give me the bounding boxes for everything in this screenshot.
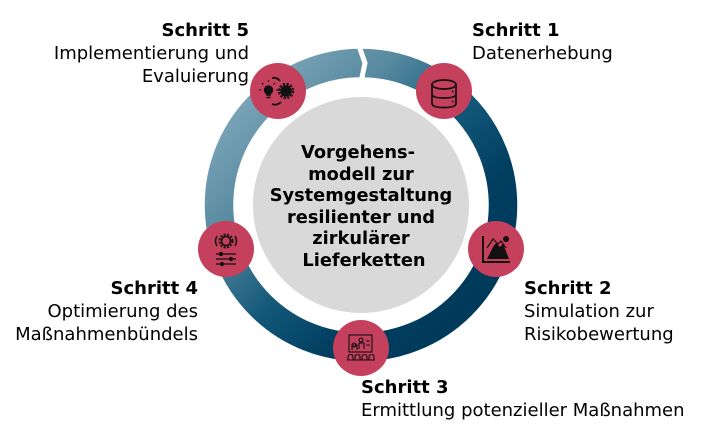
label: step 3: Schritt 3 — [361, 377, 448, 398]
center circle — [253, 97, 469, 313]
label: step 4: Optimierung des — [47, 301, 198, 322]
center title: Systemgestaltung — [270, 185, 452, 206]
label: step 5: Evaluierung — [142, 66, 249, 87]
icon: risk chart — [483, 236, 510, 262]
label: step 1 — [472, 20, 613, 64]
label: step 2: Simulation zur — [524, 301, 654, 322]
center title: Vorgehens- — [301, 142, 415, 163]
label: step 2: Schritt 2 — [524, 278, 612, 299]
step 2 node — [468, 221, 524, 277]
center title: modell zur — [308, 164, 414, 184]
label: step 4: Maßnahmenbündels — [15, 324, 198, 345]
label: step 3 — [361, 377, 685, 421]
center title: zirkulärer — [312, 228, 410, 249]
label: step 5: Implementierung und — [54, 43, 249, 64]
label: step 5 — [54, 20, 249, 87]
center title — [270, 142, 452, 270]
label: step 2 — [524, 278, 674, 345]
step 5 node — [250, 63, 306, 119]
icon: idea and gear — [259, 78, 293, 105]
step 4 node — [198, 221, 254, 277]
step 1 node — [416, 63, 472, 119]
icon: settings and sliders — [216, 234, 236, 266]
label: step 2: Risikobewertung — [524, 324, 674, 345]
label: step 4 — [15, 278, 198, 345]
icon: team at board — [347, 335, 375, 360]
center title: resilienter und — [287, 206, 435, 228]
label: step 1: Datenerhebung — [472, 43, 613, 64]
label: step 4: Schritt 4 — [110, 278, 198, 299]
center title: Lieferketten — [302, 250, 426, 270]
ring — [219, 46, 503, 347]
label: step 3: Ermittlung potenzieller Maßnahmen — [361, 400, 685, 421]
icon: database — [432, 80, 456, 108]
step 3 node — [333, 320, 389, 376]
label: step 1: Schritt 1 — [472, 20, 560, 41]
label: step 5: Schritt 5 — [162, 20, 249, 41]
